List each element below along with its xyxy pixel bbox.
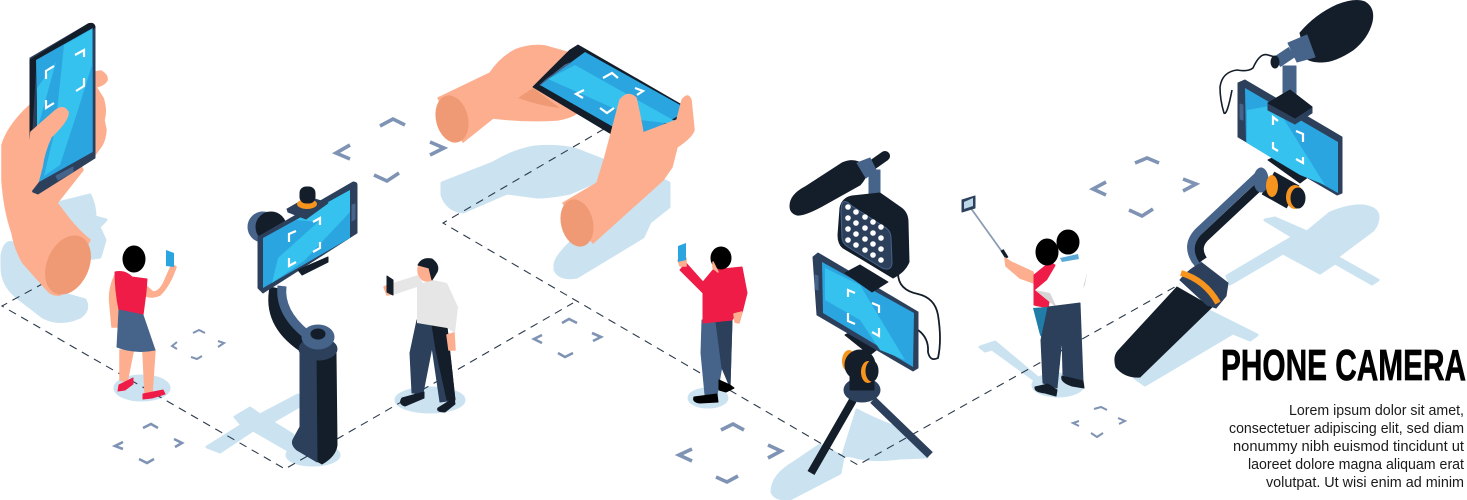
gimbal stabilizer with phone bbox=[248, 182, 357, 464]
viewfinder marks: bottom left bbox=[115, 424, 182, 463]
handheld rig with shotgun mic bbox=[1115, 1, 1373, 377]
woman with phone bbox=[110, 246, 176, 399]
body text: Lorem ipsum dolor sit amet, bbox=[1289, 403, 1464, 419]
viewfinder marks: small by woman bbox=[172, 330, 224, 359]
couple taking selfie bbox=[962, 196, 1087, 396]
ground shadows bbox=[2, 146, 1378, 499]
body text: consectetuer adipiscing elit, sed diam bbox=[1229, 421, 1464, 437]
viewfinder marks: large bottom bbox=[679, 424, 781, 482]
body text: nonummy nibh euismod tincidunt ut bbox=[1233, 439, 1464, 455]
viewfinder marks: large top bbox=[336, 119, 444, 181]
tripod rig with mic and light bbox=[790, 156, 940, 473]
dashed floor path bbox=[2, 129, 1180, 469]
viewfinder marks: small right bbox=[1073, 407, 1125, 437]
viewfinder marks: large right bbox=[1093, 158, 1196, 216]
hands holding phone horizontally bbox=[431, 45, 694, 250]
man with phone bbox=[384, 259, 458, 412]
hand holding phone vertically bbox=[2, 23, 107, 302]
viewfinder marks: centre bbox=[534, 319, 601, 357]
body text: volutpat. Ut wisi enim ad minim bbox=[1266, 475, 1464, 491]
man in red with phone bbox=[678, 243, 747, 403]
body text: laoreet dolore magna aliquam erat bbox=[1248, 457, 1464, 473]
body text bbox=[1229, 403, 1464, 491]
